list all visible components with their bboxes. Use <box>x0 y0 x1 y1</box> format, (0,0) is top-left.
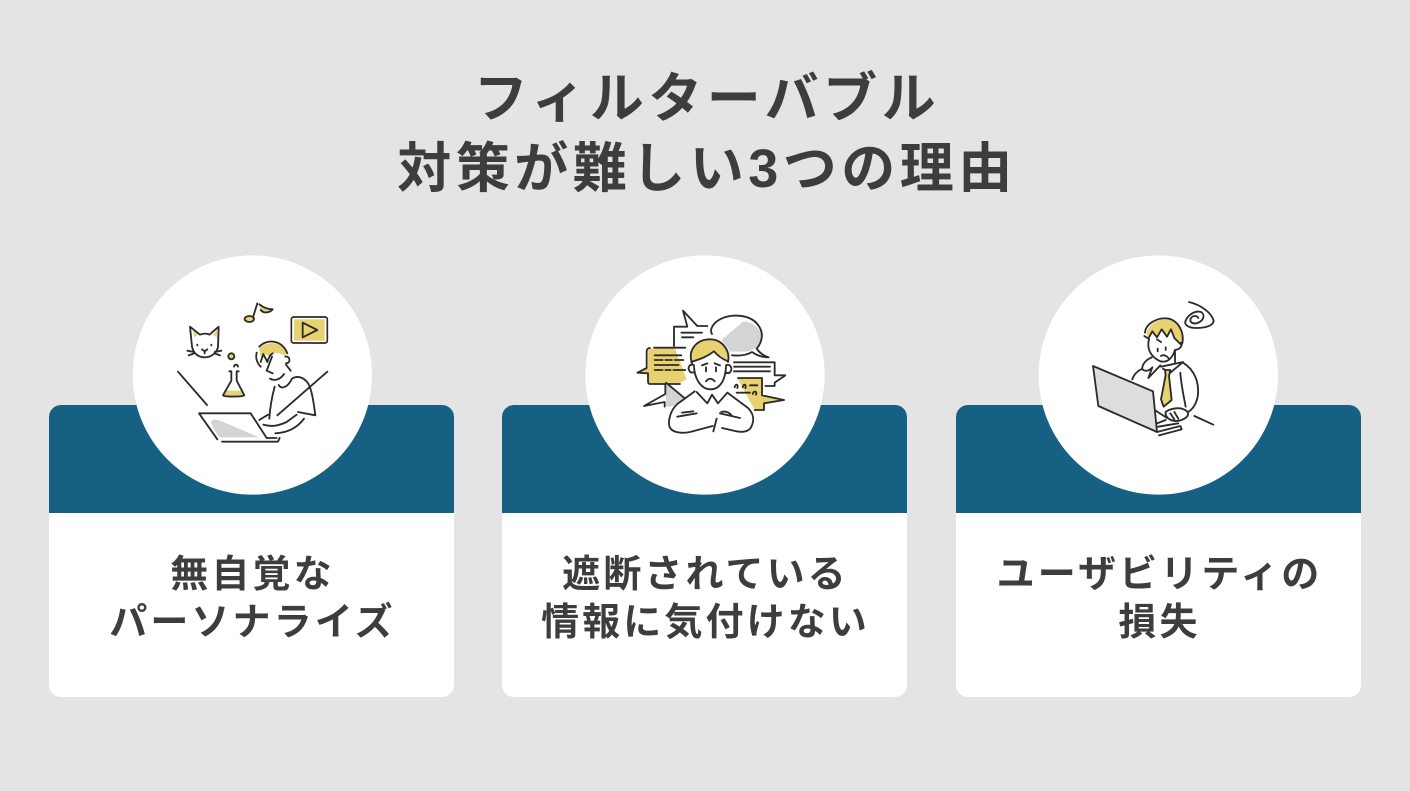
panel: card 1 <box>49 405 454 697</box>
desk line <box>1194 416 1213 425</box>
flask and bubbles <box>223 353 244 397</box>
text: card 3 label: 損失 <box>1118 602 1201 644</box>
confusion scribble <box>1185 302 1214 328</box>
title: 対策が難しい3つの理由 <box>397 139 1017 199</box>
text: card 3 label <box>997 554 1322 644</box>
person <box>669 339 753 433</box>
title <box>397 69 1017 199</box>
white speech bubble right <box>734 362 785 386</box>
text: card 2 label <box>541 554 870 644</box>
laptop <box>199 413 280 442</box>
grey triangle bubble <box>644 383 690 407</box>
yellow speech bubble lower right <box>735 378 784 410</box>
grey round bubble <box>711 316 769 357</box>
laptop <box>1093 366 1182 435</box>
panel: card 2 <box>502 405 907 697</box>
text: card 1 label: パーソナライズ <box>109 602 396 644</box>
title: フィルターバブル <box>474 69 940 129</box>
text: card 3 label: ユーザビリティの <box>997 554 1322 596</box>
text: card 1 label <box>109 554 396 644</box>
table lines <box>178 372 207 405</box>
text: card 1 label: 無自覚な <box>170 554 335 596</box>
cat <box>187 327 221 357</box>
person <box>1132 318 1198 421</box>
person <box>256 342 327 433</box>
panel: card 3 <box>956 405 1361 697</box>
icon: person at laptop with cat, music, flask and video <box>132 256 372 495</box>
yellow speech bubble left <box>637 348 687 384</box>
text: card 2 label: 情報に気付けない <box>541 602 870 644</box>
video icon <box>291 317 327 343</box>
icon: worried person with speech bubbles <box>585 256 824 495</box>
icon: confused office worker at laptop <box>1038 256 1278 495</box>
text: card 2 label: 遮断されている <box>562 554 849 596</box>
white speech bubble top <box>674 311 707 346</box>
music note <box>245 303 273 322</box>
